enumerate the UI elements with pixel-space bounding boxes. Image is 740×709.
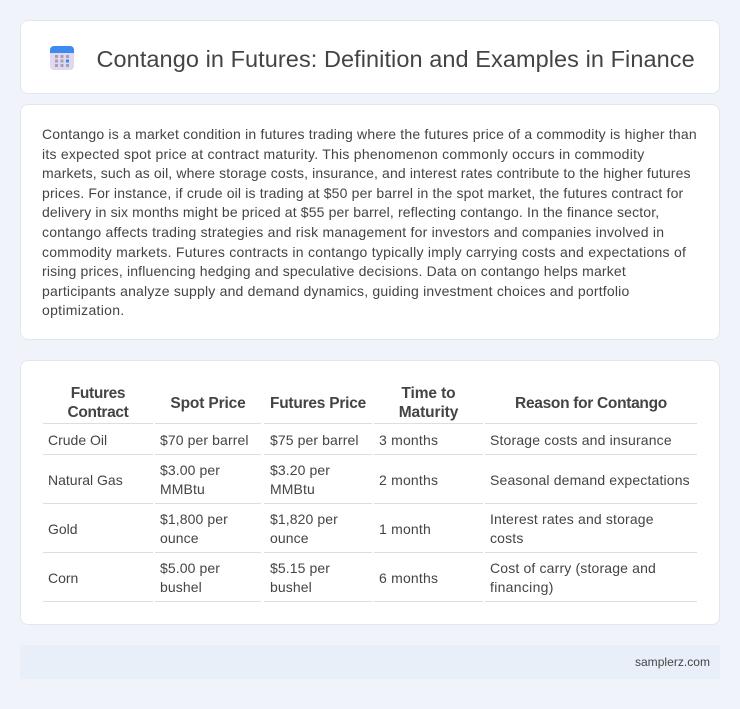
row: gold: Gold [48, 521, 78, 537]
row: gold: $1,800 per [160, 511, 228, 527]
panel: table card [20, 360, 720, 625]
row: gold: ounce [160, 530, 199, 546]
row: natural gas: 2 months [379, 472, 438, 488]
text block: contango description: prices. For instance, if crude oil is trading at $50 per barrel in the spot market, the futures contract for [42, 185, 683, 201]
row: crude oil: Storage costs and insurance [490, 432, 672, 448]
footer source text: samplerz.com [635, 655, 710, 669]
table header row: Reason for Contango [515, 395, 667, 412]
row: natural gas: $3.00 per [160, 462, 220, 478]
text block: contango description: delivery in six months might be priced at $55 per barrel, reflecting contango. In the finance sector, [42, 204, 659, 220]
row: gold: costs [490, 530, 523, 546]
table header row: Contract [68, 404, 128, 421]
text block: contango description: its expected spot price at contract maturity. This phenomenon commonly occurs in commodity [42, 146, 644, 162]
panel: title header [20, 20, 720, 94]
row: gold [48, 511, 654, 546]
table header row [68, 385, 667, 421]
text block: contango description: optimization. [42, 302, 124, 318]
row: gold: Interest rates and storage [490, 511, 654, 527]
text block: contango description: commodity markets. Futures contracts in contango typically imply carrying costs and expectations of [42, 244, 686, 260]
table header row: Spot Price [170, 395, 246, 412]
row: gold: ounce [270, 530, 309, 546]
row: crude oil: 3 months [379, 432, 438, 448]
row: corn: $5.00 per [160, 560, 220, 576]
table: contango examples [43, 385, 697, 602]
row: natural gas [48, 462, 690, 497]
row: natural gas: Natural Gas [48, 472, 123, 488]
text block: contango description [42, 126, 697, 318]
row: corn: Corn [48, 570, 78, 586]
row: corn: 6 months [379, 570, 438, 586]
footer bar [20, 645, 720, 679]
row: natural gas: MMBtu [270, 481, 315, 497]
row: corn: Cost of carry (storage and [490, 560, 656, 576]
row: natural gas: $3.20 per [270, 462, 330, 478]
row: crude oil: Crude Oil [48, 432, 107, 448]
row: corn [48, 560, 656, 595]
icon: calendar [50, 46, 74, 70]
text block: contango description: participants analyze supply and demand dynamics, guiding investment choices and portfolio [42, 283, 629, 299]
row: corn: bushel [160, 579, 202, 595]
text block: contango description: Contango is a market condition in futures trading where the futures price of a commodity is higher than [42, 126, 697, 142]
panel: description [20, 104, 720, 340]
row: gold: 1 month [379, 521, 431, 537]
row: gold: $1,820 per [270, 511, 338, 527]
row: corn: financing) [490, 579, 554, 595]
row: crude oil [48, 432, 672, 448]
text block: contango description: contango affects trading strategies and risk management for investors and companies involved in [42, 224, 664, 240]
row: natural gas: Seasonal demand expectations [490, 472, 690, 488]
row: natural gas: MMBtu [160, 481, 205, 497]
title: Contango in Futures: Definition and Examples in Finance [96, 46, 695, 72]
row: crude oil: $75 per barrel [270, 432, 359, 448]
row: crude oil: $70 per barrel [160, 432, 249, 448]
table header row: Time to [401, 385, 456, 402]
table header row: Maturity [399, 404, 458, 421]
row: corn: bushel [270, 579, 312, 595]
table header row: Futures [71, 385, 125, 402]
row: corn: $5.15 per [270, 560, 330, 576]
text block: contango description: rising prices, influencing hedging and speculative decisions. Data on contango helps market [42, 263, 626, 279]
text block: contango description: markets, such as oil, where storage costs, insurance, and interest rates contribute to the higher futures [42, 165, 691, 181]
table header row: Futures Price [270, 395, 366, 412]
